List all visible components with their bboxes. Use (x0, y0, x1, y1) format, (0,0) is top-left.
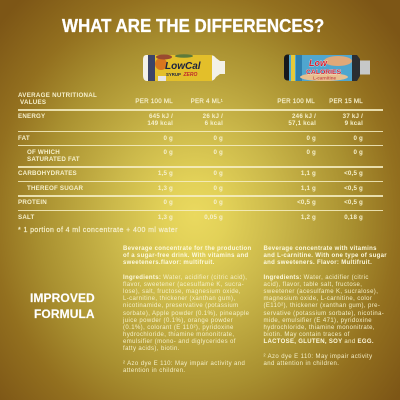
row: protein (18, 199, 363, 206)
text: right product description: (E110²), thickener (xanthan gum), pre- (264, 303, 380, 309)
row: protein: 0 g (163, 199, 173, 206)
table header: AVERAGE NUTRITIONAL (18, 92, 97, 98)
text: left product description: flavor, sweetener (acesulfame K, sucra- (123, 282, 244, 288)
row: salt: 0,05 g (204, 214, 223, 221)
footnote: * 1 portion of 4 ml concentrate + 400 ml water (18, 227, 178, 234)
text: left product description: emulsifier (mono- and diglycerides of (123, 339, 236, 345)
column headers: PER 15 ML (329, 98, 363, 105)
row: fat: FAT (18, 134, 30, 142)
text: right product description (264, 246, 387, 367)
row: carbohydrates (18, 170, 363, 177)
row: salt: 1,2 g (301, 214, 316, 221)
text: left product description: lose), salt, fructose, magnesium oxide, (123, 289, 241, 295)
row: carbohydrates: CARBOHYDRATES (18, 170, 77, 177)
row: protein: <0,5 g (297, 199, 316, 206)
row: salt: 1,3 g (158, 214, 173, 221)
text: left product description: (0.1%), colorant (E 110²), pyridoxine (123, 325, 234, 331)
row: energy: ENERGY (18, 112, 45, 120)
heading: improved formula: FORMULA (34, 307, 95, 321)
text: right product description: biotin. May contain traces of (264, 332, 350, 338)
row: salt (18, 214, 363, 221)
row: carbohydrates: 1,1 g (301, 170, 316, 177)
icon: LowCal bottle: ZERO (182, 72, 198, 78)
row: protein: PROTEIN (18, 199, 47, 206)
text: left product description: sweeteners.flavor: multifruit. (123, 260, 215, 266)
row: energy: 26 kJ / (203, 112, 223, 120)
text: right product description: acid), flavor, table salt, fructose, (264, 282, 362, 288)
row: fat (18, 134, 363, 142)
text: left product description: Beverage concentrate for the production (123, 246, 252, 252)
row: fat: 0 g (163, 134, 173, 142)
text: right product description: servative (potassium sorbate), nicotina- (264, 311, 384, 317)
row: carbohydrates: <0,5 g (344, 170, 363, 177)
text: left product description: attention in children. (123, 368, 186, 374)
text: right product description: and L-carnitine. With one type of sugar (264, 253, 387, 259)
text: right product description: sweetener (acesulfame K, sucralose), (264, 289, 378, 295)
heading: improved formula (30, 291, 95, 321)
heading: improved formula: IMPROVED (30, 291, 95, 305)
row: energy: 6 kcal (205, 120, 223, 127)
text: right product description: ² Azo dye E 110: May impair activity (264, 354, 372, 360)
row: sugar: THEREOF SUGAR (27, 185, 83, 192)
row: salt: SALT (18, 214, 34, 221)
column headers: PER 100 ML (135, 98, 173, 105)
row: saturated fat: 0 g (353, 148, 363, 156)
text: right product description: hydrochloride, thiamine mononitrate, (264, 325, 375, 331)
text: right product description: and sweeteners. Flavor: Multifruit. (264, 260, 372, 266)
row: saturated fat (27, 148, 363, 163)
row: energy: 9 kcal (345, 120, 363, 127)
row: saturated fat: OF WHICH (27, 148, 60, 156)
text: right product description: mide, emulsifier (E 471), pyridoxine (264, 318, 372, 324)
icon: LowCal bottle: SYRUP (166, 72, 181, 77)
row: energy: 37 kJ / (343, 112, 363, 120)
text: left product description: hydrochloride, thiamine mononitrate, (123, 332, 234, 338)
text: right product description: magnesium oxide, L-carnitine, color (264, 296, 372, 302)
text: left product description: nicotinamide, preservative (potassium (123, 303, 239, 309)
icon: LowCal bottle: LowCal (165, 61, 201, 72)
text: left product description: of a sugar-free drink. With vitamins and (123, 253, 248, 259)
row: sugar: <0,5 g (344, 185, 363, 192)
row: fat: 0 g (306, 134, 316, 142)
text: right product description: Beverage concentrate with vitamins (264, 246, 377, 252)
row: fat: 0 g (213, 134, 223, 142)
icon: Low Calories bottle: Low (309, 58, 328, 68)
column headers (135, 98, 363, 105)
row: protein: 0 g (213, 199, 223, 206)
row: carbohydrates: 0 g (213, 170, 223, 177)
column headers: PER 100 ML (277, 98, 315, 105)
row: saturated fat: 0 g (163, 148, 173, 156)
text: right product description: LACTOSE, GLUTEN, SOY and EGG. (264, 339, 374, 345)
text: left product description (122, 246, 252, 374)
row: energy: 149 kcal (147, 120, 173, 127)
row: sugar: 0 g (213, 185, 223, 192)
row: sugar: 1,1 g (301, 185, 316, 192)
text: left product description: juice powder (0.1%), orange powder (123, 318, 233, 324)
table header: VALUES (20, 99, 46, 106)
table header (18, 92, 97, 106)
row: saturated fat: SATURATED FAT (27, 156, 80, 163)
row: sugar (27, 185, 363, 192)
row: salt: 0,18 g (344, 214, 363, 221)
text: left product description: Ingredients: Water, acidifier (citric acid), (123, 275, 247, 281)
text: left product description: sorbate), Apple powder (0.1%), pineapple (123, 311, 249, 317)
text: right product description: Ingredients: Water, acidifier (citric (264, 275, 369, 281)
row: sugar: 1,3 g (158, 185, 173, 192)
icon: LowCal bottle (143, 54, 225, 81)
row: energy: 246 kJ / (292, 112, 316, 120)
row: energy (18, 112, 363, 127)
row: saturated fat: 0 g (306, 148, 316, 156)
row: energy: 645 kJ / (149, 112, 173, 120)
text: left product description: fatty acids), biotin. (123, 346, 180, 352)
icon: Low Calories bottle: CALORIES (306, 69, 342, 76)
text: right product description: and attention in children. (264, 361, 339, 367)
column headers: PER 4 ML1 (191, 98, 223, 105)
text: left product description: ² Azo dye E 110: May impair activity and (123, 361, 245, 367)
text: left product description: L-carnitine, thickener (xanthan gum), (123, 296, 236, 302)
icon: Low Calories bottle: L-carnitine (313, 76, 337, 80)
row: energy: 57,1 kcal (288, 120, 316, 127)
title: WHAT ARE THE DIFFERENCES? (62, 16, 324, 36)
row: fat: 0 g (353, 134, 363, 142)
row: saturated fat: 0 g (213, 148, 223, 156)
icon: Low Calories bottle (284, 54, 370, 81)
row: carbohydrates: 1,5 g (158, 170, 173, 177)
row: protein: <0,5 g (344, 199, 363, 206)
